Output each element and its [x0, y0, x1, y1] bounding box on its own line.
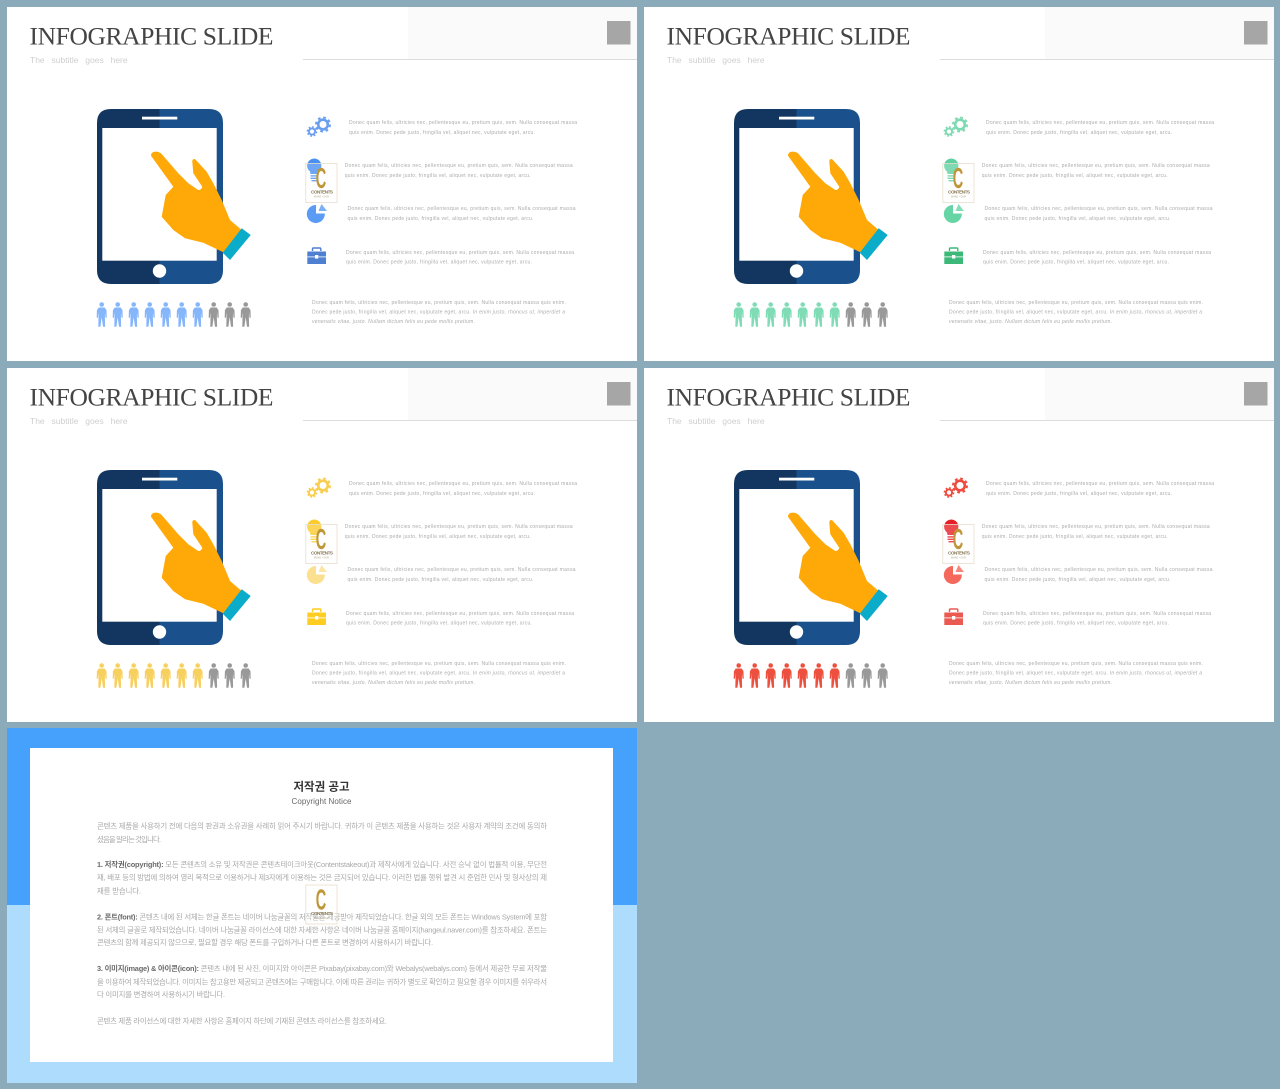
watermark stamp	[306, 161, 337, 202]
icon: light bulb	[307, 158, 321, 181]
text block 2: quis enim. Donec pede justo, fringilla vel, aliquet nec, vulputate eget, arcu.	[982, 534, 1168, 540]
bottom paragraph	[949, 300, 1203, 325]
bottom paragraph	[949, 661, 1203, 686]
bottom paragraph: venenatis vitae, justo. Nullam dictum felis eu pede mollis pretium.	[949, 680, 1112, 686]
icon: gears	[944, 118, 967, 136]
copyright clause 1	[97, 860, 547, 896]
copyright clause 3: 3. 이미지(image) & 아이콘(icon): 콘텐츠 내에 된 사진, 이미지와 아이콘은 Pixabay(pixabay.com)와 Webalys(webalys.com) 등에서 제공한 무료 저작물	[97, 964, 547, 973]
watermark stamp	[306, 522, 337, 564]
icon: gears	[944, 478, 967, 497]
icon: gears	[307, 478, 330, 497]
text block 1	[986, 120, 1214, 136]
panel: slide 2 green	[644, 7, 1274, 361]
text block 1: Donec quam felis, ultricies nec, pellentesque eu, pretium quis, sem. Nulla consequat massa	[986, 481, 1214, 487]
people pictogram row	[734, 302, 888, 327]
subtitle: The subtitle goes here	[30, 416, 128, 426]
text block 4: Donec quam felis, ultricies nec, pellentesque eu, pretium quis, sem. Nulla consequat massa	[983, 611, 1211, 617]
copyright intro: 콘텐츠 제품을 사용하기 전에 다음의 판권과 소유권을 사례히 읽어 주시기 바랍니다. 귀하가 이 콘텐츠 제품을 사용하는 것은 사용자 계약의 조건에 동의하	[97, 822, 547, 830]
copyright clause 1: 재를 받습니다.	[97, 886, 141, 896]
text block 2: Donec quam felis, ultricies nec, pellentesque eu, pretium quis, sem. Nulla consequat massa	[982, 524, 1210, 530]
hand illustration	[151, 152, 251, 260]
text block 4: Donec quam felis, ultricies nec, pellentesque eu, pretium quis, sem. Nulla consequat massa	[983, 250, 1211, 256]
text block 1	[349, 120, 577, 136]
title: INFOGRAPHIC SLIDE	[30, 21, 274, 50]
text block 1: Donec quam felis, ultricies nec, pellentesque eu, pretium quis, sem. Nulla consequat massa	[986, 120, 1214, 126]
text block 3	[348, 567, 576, 583]
text block 4: quis enim. Donec pede justo, fringilla vel, aliquet nec, vulputate eget, arcu.	[346, 260, 532, 266]
tablet illustration	[97, 470, 223, 645]
hand illustration	[788, 152, 888, 260]
people pictogram row	[734, 663, 888, 688]
bottom paragraph: venenatis vitae, justo. Nullam dictum felis eu pede mollis pretium.	[312, 319, 475, 325]
text block 3	[984, 567, 1213, 583]
icon: briefcase	[307, 248, 326, 264]
icon: briefcase	[307, 609, 326, 625]
copyright clause 3	[97, 964, 547, 999]
icon: gears	[307, 118, 330, 136]
bottom paragraph	[312, 661, 566, 686]
bottom paragraph	[312, 300, 566, 325]
text block 2: Donec quam felis, ultricies nec, pellentesque eu, pretium quis, sem. Nulla consequat massa	[345, 524, 573, 530]
text block 1: quis enim. Donec pede justo, fringilla vel, aliquet nec, vulputate eget, arcu.	[349, 130, 535, 136]
subtitle: The subtitle goes here	[667, 416, 765, 426]
icon: pie chart	[944, 204, 964, 223]
hand illustration	[151, 513, 251, 621]
watermark stamp	[943, 161, 974, 202]
text block 4: quis enim. Donec pede justo, fringilla vel, aliquet nec, vulputate eget, arcu.	[983, 620, 1169, 626]
panel: copyright notice	[7, 728, 637, 1083]
text block 4: Donec quam felis, ultricies nec, pellentesque eu, pretium quis, sem. Nulla consequat massa	[346, 611, 574, 617]
subtitle: The subtitle goes here	[30, 55, 128, 65]
watermark stamp	[306, 883, 337, 924]
copyright clause 3: 다 이미지를 변경하여 사용하시기 바랍니다.	[97, 990, 225, 999]
copyright clause 3: 을 이용하여 제작되었습니다. 이미지는 참고용만 제공되고 콘텐츠에는 구매합니다. 이에 따른 권리는 귀하가 별도로 확인하고 필요할 경우 이미지를 쉬우라서	[97, 978, 547, 986]
icon: pie chart	[944, 565, 964, 584]
text block 4	[983, 611, 1211, 626]
panel: slide 4 red	[644, 368, 1274, 722]
copyright clause 2	[97, 912, 547, 947]
icon: light bulb	[944, 519, 958, 542]
text block 3: quis enim. Donec pede justo, fringilla vel, aliquet nec, vulputate eget, arcu.	[984, 216, 1170, 222]
text block 1	[349, 481, 577, 497]
icon: pie chart	[307, 204, 327, 223]
copyright clause 2: 된 서체의 글꼴로 제작되었습니다. 네이버 나눔글꼴 라이선스에 대한 자세한 사항은 네이버 나눔글꼴 홈페이지(hangeul.naver.com)를 참조하세요. 폰트는	[97, 926, 547, 934]
copyright subheading: Copyright Notice	[292, 797, 352, 806]
text block 2: Donec quam felis, ultricies nec, pellentesque eu, pretium quis, sem. Nulla consequat massa	[982, 163, 1210, 169]
icon: briefcase	[944, 609, 963, 625]
copyright clause 2: 2. 폰트(font): 콘텐츠 내에 된 서체는 한글 폰트는 네이버 나눔글꼴의 저작물을 제공받아 제작되었습니다. 한글 외의 모든 폰트는 Windows System에 포함	[97, 912, 547, 922]
hand illustration	[788, 513, 888, 621]
icon: light bulb	[944, 158, 958, 181]
bottom paragraph: venenatis vitae, justo. Nullam dictum felis eu pede mollis pretium.	[949, 319, 1112, 325]
text block 2: quis enim. Donec pede justo, fringilla vel, aliquet nec, vulputate eget, arcu.	[982, 173, 1168, 179]
text block 1: quis enim. Donec pede justo, fringilla vel, aliquet nec, vulputate eget, arcu.	[986, 130, 1172, 136]
bottom paragraph: Donec quam felis, ultricies nec, pellentesque eu, pretium quis, sem. Nulla consequat massa quis enim.	[949, 661, 1203, 667]
text block 1: quis enim. Donec pede justo, fringilla vel, aliquet nec, vulputate eget, arcu.	[986, 491, 1172, 497]
icon: briefcase	[944, 248, 963, 264]
copyright intro	[97, 822, 547, 844]
panel: slide 3 yellow	[7, 368, 637, 722]
text block 2: quis enim. Donec pede justo, fringilla vel, aliquet nec, vulputate eget, arcu.	[345, 173, 531, 179]
tablet illustration	[97, 109, 223, 284]
bottom paragraph: Donec quam felis, ultricies nec, pellentesque eu, pretium quis, sem. Nulla consequat massa quis enim.	[312, 661, 566, 667]
copyright intro: 셨음을 알리는 것입니다.	[97, 835, 161, 844]
copyright closing note: 콘텐츠 제품 라이선스에 대한 자세한 사항은 홈페이지 하단에 기재된 콘텐츠 라이선스를 참조하세요.	[97, 1016, 387, 1026]
text block 4: quis enim. Donec pede justo, fringilla vel, aliquet nec, vulputate eget, arcu.	[346, 620, 532, 626]
text block 4	[983, 250, 1211, 266]
text block 2	[345, 163, 573, 179]
text block 2	[345, 524, 573, 540]
copyright clause 1: 재, 배포 등의 방법에 의하여 영리 목적으로 이용하거나 제3자에게 이용하는 것은 금지되어 있습니다. 이러한 법률 행위 발견 시 준엄한 민사 및 형사상의 제	[97, 873, 547, 882]
text block 1: Donec quam felis, ultricies nec, pellentesque eu, pretium quis, sem. Nulla consequat massa	[349, 481, 577, 487]
text block 3	[348, 206, 576, 222]
icon: pie chart	[307, 565, 327, 584]
tablet illustration	[734, 470, 860, 645]
text block 3: Donec quam felis, ultricies nec, pellentesque eu, pretium quis, sem. Nulla consequat massa	[984, 567, 1213, 573]
text block 1	[986, 481, 1214, 497]
text block 3: Donec quam felis, ultricies nec, pellentesque eu, pretium quis, sem. Nulla consequat massa	[984, 206, 1213, 212]
text block 1: Donec quam felis, ultricies nec, pellentesque eu, pretium quis, sem. Nulla consequat massa	[349, 120, 577, 126]
text block 3: quis enim. Donec pede justo, fringilla vel, aliquet nec, vulputate eget, arcu.	[348, 216, 534, 222]
text block 3: quis enim. Donec pede justo, fringilla vel, aliquet nec, vulputate eget, arcu.	[984, 577, 1170, 583]
text block 3	[984, 206, 1213, 222]
subtitle: The subtitle goes here	[667, 55, 765, 65]
text block 2: Donec quam felis, ultricies nec, pellentesque eu, pretium quis, sem. Nulla consequat massa	[345, 163, 573, 169]
text block 4: Donec quam felis, ultricies nec, pellentesque eu, pretium quis, sem. Nulla consequat massa	[346, 250, 574, 256]
text block 4	[346, 250, 574, 266]
title: INFOGRAPHIC SLIDE	[30, 382, 274, 411]
title: INFOGRAPHIC SLIDE	[666, 382, 910, 411]
bottom paragraph: Donec quam felis, ultricies nec, pellentesque eu, pretium quis, sem. Nulla consequat massa quis enim.	[949, 300, 1203, 306]
text block 3: Donec quam felis, ultricies nec, pellentesque eu, pretium quis, sem. Nulla consequat massa	[348, 206, 576, 212]
bottom paragraph: Donec pede justo, fringilla vel, aliquet nec, vulputate eget, arcu. In enim justo, rhoncus ut, imperdiet a	[949, 310, 1202, 316]
text block 4	[346, 611, 574, 626]
copyright heading: 저작권 공고	[293, 780, 350, 794]
title: INFOGRAPHIC SLIDE	[666, 21, 910, 50]
people pictogram row	[97, 302, 251, 327]
watermark stamp	[943, 522, 974, 564]
bottom paragraph: Donec pede justo, fringilla vel, aliquet nec, vulputate eget, arcu. In enim justo, rhoncus ut, imperdiet a	[949, 670, 1202, 676]
copyright clause 2: 콘텐츠의 함께 제공되지 않으므로, 필요할 경우 해당 폰트를 구입하거나 다른 폰트로 변경하여 사용하시기 바랍니다.	[97, 938, 433, 947]
people pictogram row	[97, 663, 251, 688]
text block 2	[982, 163, 1210, 179]
text block 3: Donec quam felis, ultricies nec, pellentesque eu, pretium quis, sem. Nulla consequat massa	[348, 567, 576, 573]
bottom paragraph: Donec pede justo, fringilla vel, aliquet nec, vulputate eget, arcu. In enim justo, rhoncus ut, imperdiet a	[312, 310, 565, 316]
bottom paragraph: venenatis vitae, justo. Nullam dictum felis eu pede mollis pretium.	[312, 680, 475, 686]
copyright clause 1: 1. 저작권(copyright): 모든 콘텐츠의 소유 및 저작권은 콘텐츠테이크아웃(Contentstakeout)과 제작사에게 있습니다. 사전 승낙 없이 법률적 이용, 무단전	[97, 860, 547, 869]
text block 1: quis enim. Donec pede justo, fringilla vel, aliquet nec, vulputate eget, arcu.	[349, 491, 535, 497]
text block 2	[982, 524, 1210, 540]
icon: light bulb	[307, 519, 321, 542]
bottom paragraph: Donec quam felis, ultricies nec, pellentesque eu, pretium quis, sem. Nulla consequat massa quis enim.	[312, 300, 566, 306]
tablet illustration	[734, 109, 860, 284]
text block 4: quis enim. Donec pede justo, fringilla vel, aliquet nec, vulputate eget, arcu.	[983, 260, 1169, 266]
panel: slide 1 blue	[7, 7, 637, 361]
text block 2: quis enim. Donec pede justo, fringilla vel, aliquet nec, vulputate eget, arcu.	[345, 534, 531, 540]
text block 3: quis enim. Donec pede justo, fringilla vel, aliquet nec, vulputate eget, arcu.	[348, 577, 534, 583]
bottom paragraph: Donec pede justo, fringilla vel, aliquet nec, vulputate eget, arcu. In enim justo, rhoncus ut, imperdiet a	[312, 670, 565, 676]
